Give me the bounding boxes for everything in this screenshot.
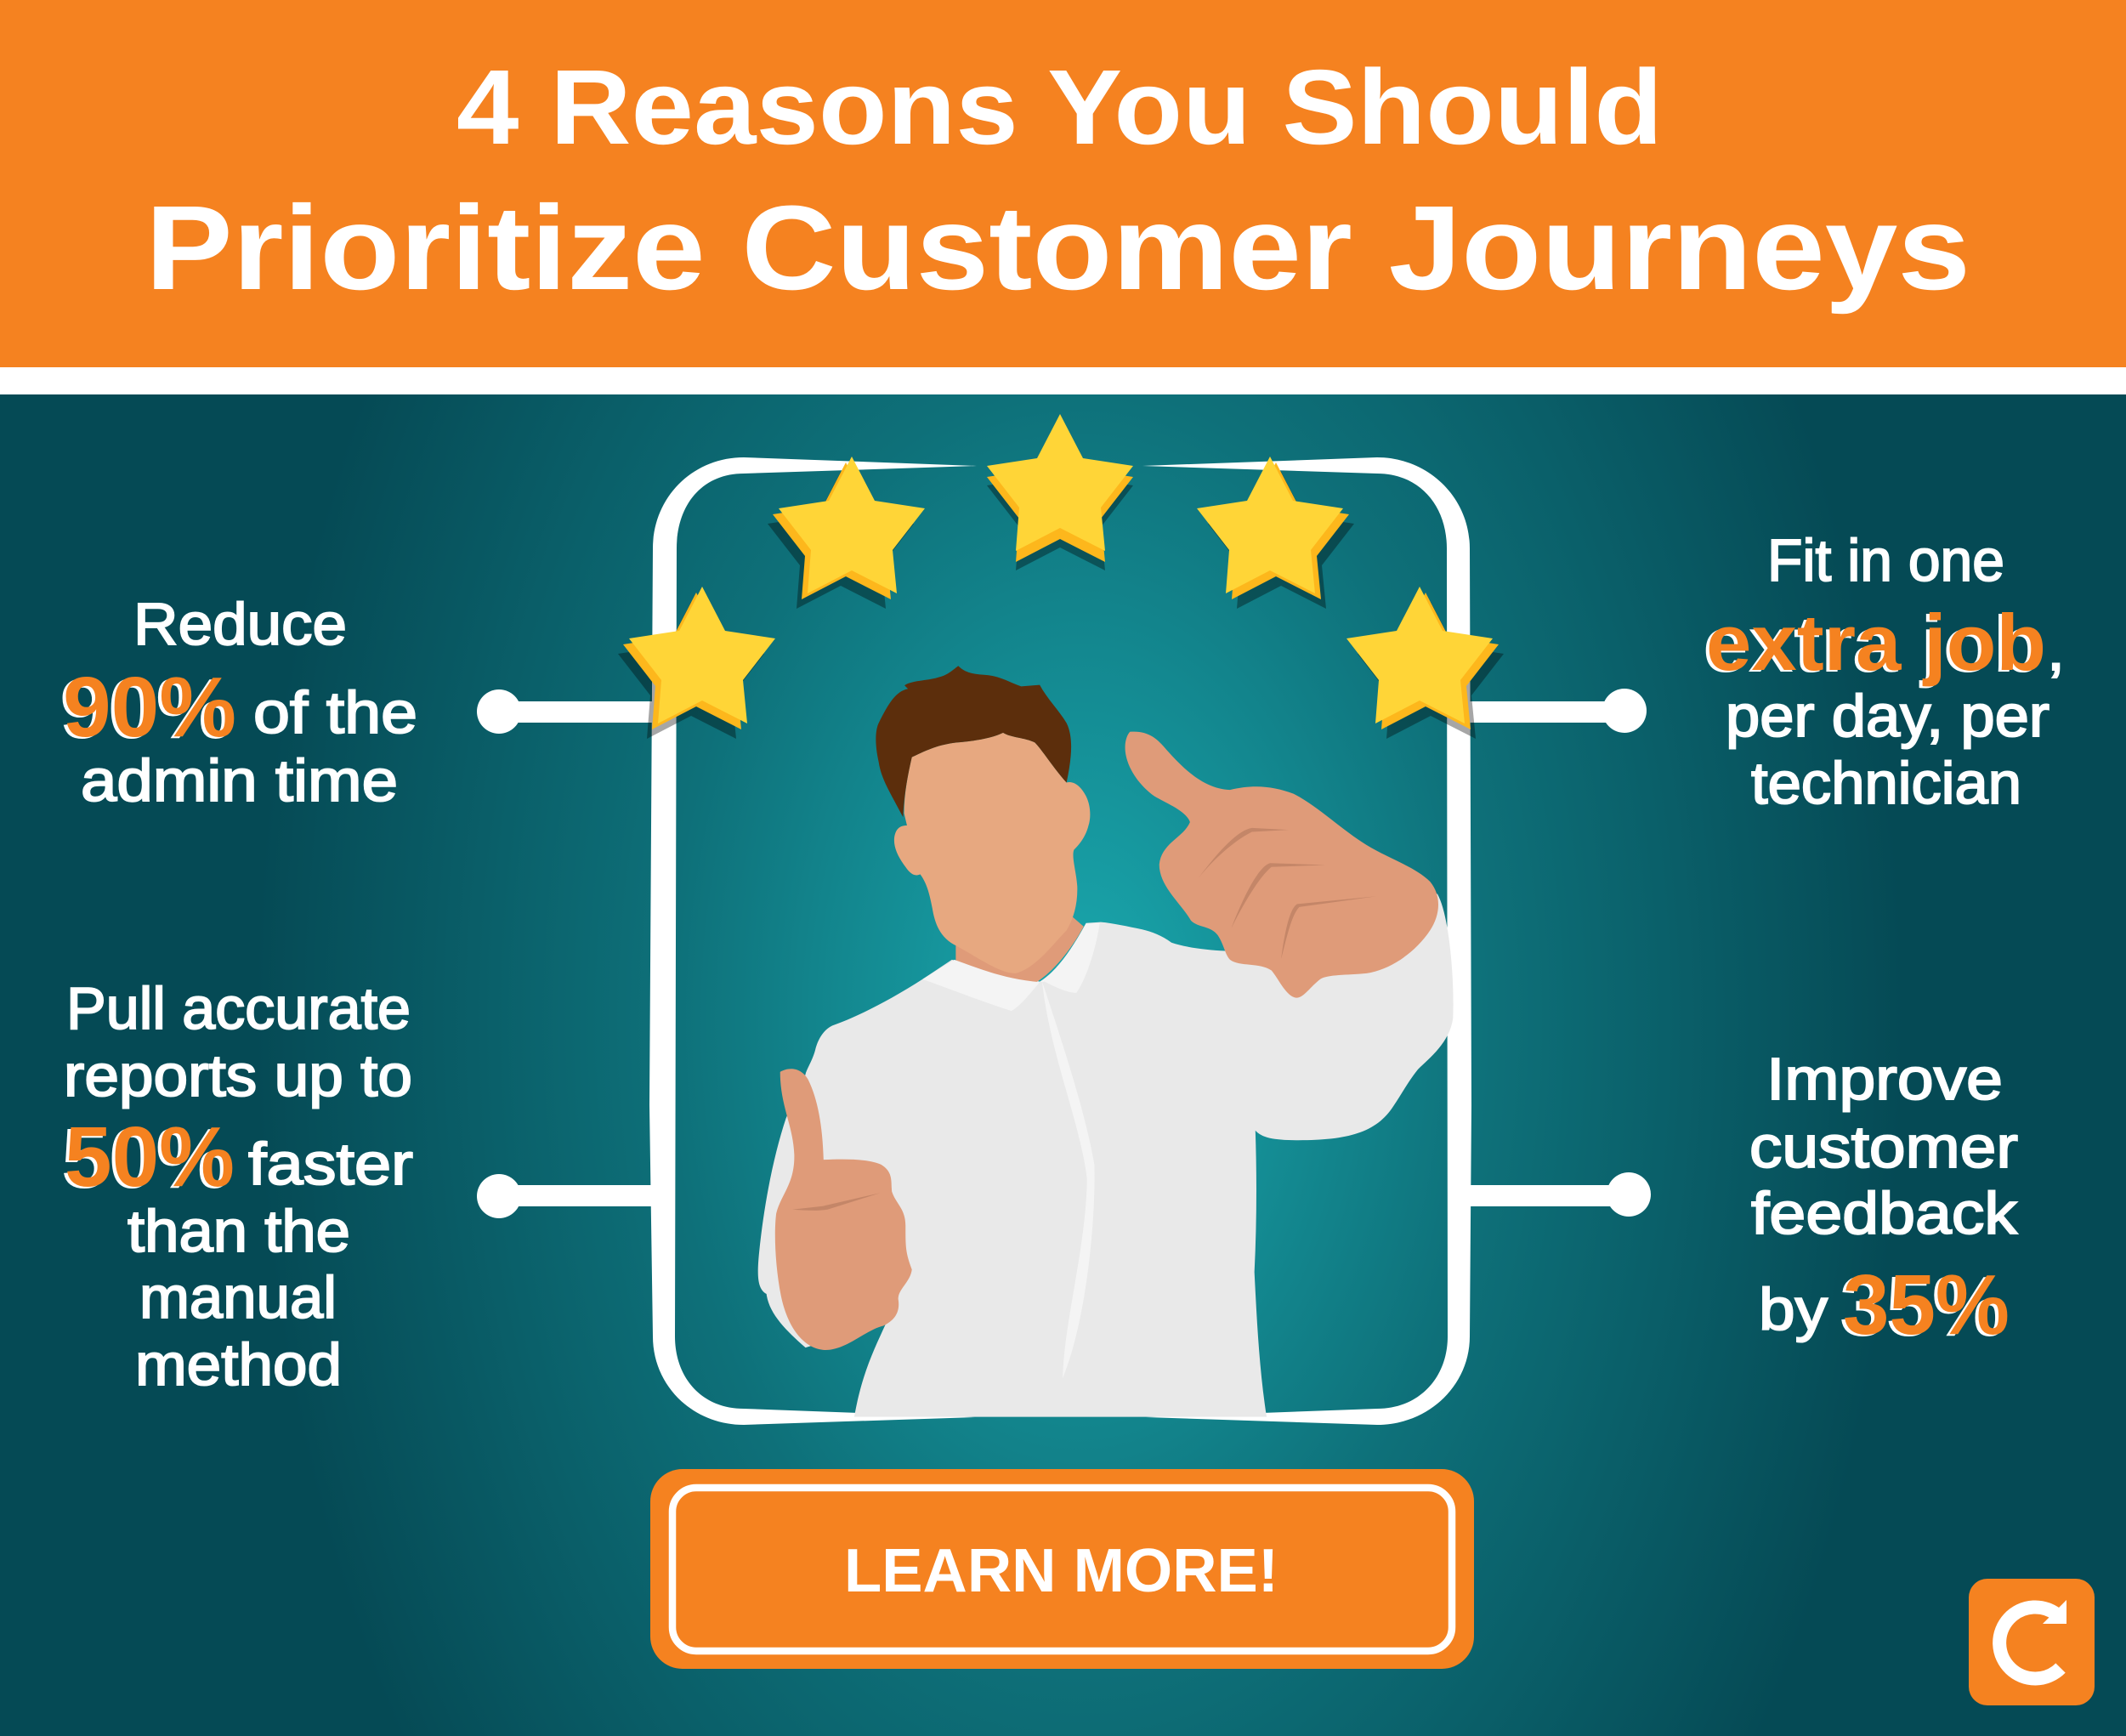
text block: fit in one extra job: per day, per [1726, 683, 2049, 749]
thumbs up hand [775, 1069, 912, 1350]
neck [955, 917, 1084, 983]
text block: pull accurate reports: method [135, 1331, 342, 1398]
text block: fit in one extra job [1703, 527, 2065, 816]
text block: pull accurate reports [61, 975, 413, 1398]
highlight: 35%: 35% [1840, 1259, 2006, 1354]
text block: reduce admin time: admin time [81, 747, 398, 814]
star 5 [1346, 587, 1504, 739]
connector: top right [1458, 689, 1647, 733]
text block: improve customer feedback [1749, 1046, 2018, 1354]
button label: LEARN MORE! [844, 1537, 1278, 1605]
text block: reduce admin time: Reduce [133, 591, 347, 657]
highlight: extra job: extra job [1703, 599, 2043, 689]
text block: improve customer feedback: Improve [1766, 1046, 2003, 1112]
highlight: 90%: 90% [60, 661, 233, 757]
title line 2: Prioritize Customer Journeys [145, 180, 1970, 315]
star 1 [618, 587, 775, 739]
shirt collar [922, 923, 1100, 1378]
text block: reduce admin time [60, 591, 417, 814]
text block: fit in one extra job: technician [1751, 750, 2021, 816]
text block: improve customer feedback: feedback [1751, 1180, 2018, 1246]
hair [876, 666, 1071, 817]
connector: top left [477, 689, 669, 734]
man illustration [758, 666, 1454, 1417]
highlight: 90%: 90% [63, 660, 236, 755]
text block: improve customer feedback: by [1759, 1276, 1828, 1342]
text block: fit in one extra job: Fit in one [1767, 527, 2004, 593]
text block: reduce admin time: of the [253, 679, 417, 746]
text block: pull accurate reports: Pull accurate [66, 975, 411, 1041]
star 4 [1197, 457, 1354, 609]
text block: pull accurate reports: manual [139, 1264, 337, 1330]
shirt [758, 894, 1454, 1417]
text block: pull accurate reports: reports up to [64, 1042, 412, 1109]
highlight: 50%: 50% [61, 1111, 231, 1206]
white rounded frame [649, 457, 1471, 1425]
connector: bottom left [477, 1174, 665, 1218]
text block: fit in one extra job: , [2047, 616, 2065, 683]
head [894, 733, 1090, 973]
text block: pull accurate reports: faster [248, 1131, 413, 1197]
learn more button [650, 1469, 1474, 1669]
pointing hand [1125, 732, 1438, 998]
teal radial background panel [0, 394, 2126, 1736]
text block: improve customer feedback: customer [1749, 1114, 2018, 1180]
star 3 center [987, 414, 1133, 570]
highlight: extra job: extra job [1706, 598, 2046, 687]
title line 1: 4 Reasons You Should [456, 48, 1663, 167]
header banner [0, 0, 2126, 367]
highlight: 35%: 35% [1843, 1257, 2010, 1353]
text block: pull accurate reports: than the [128, 1198, 350, 1264]
connector: bottom right [1458, 1172, 1651, 1217]
star 2 [768, 457, 925, 609]
logo [1969, 1579, 2095, 1705]
highlight: 50%: 50% [65, 1109, 235, 1205]
